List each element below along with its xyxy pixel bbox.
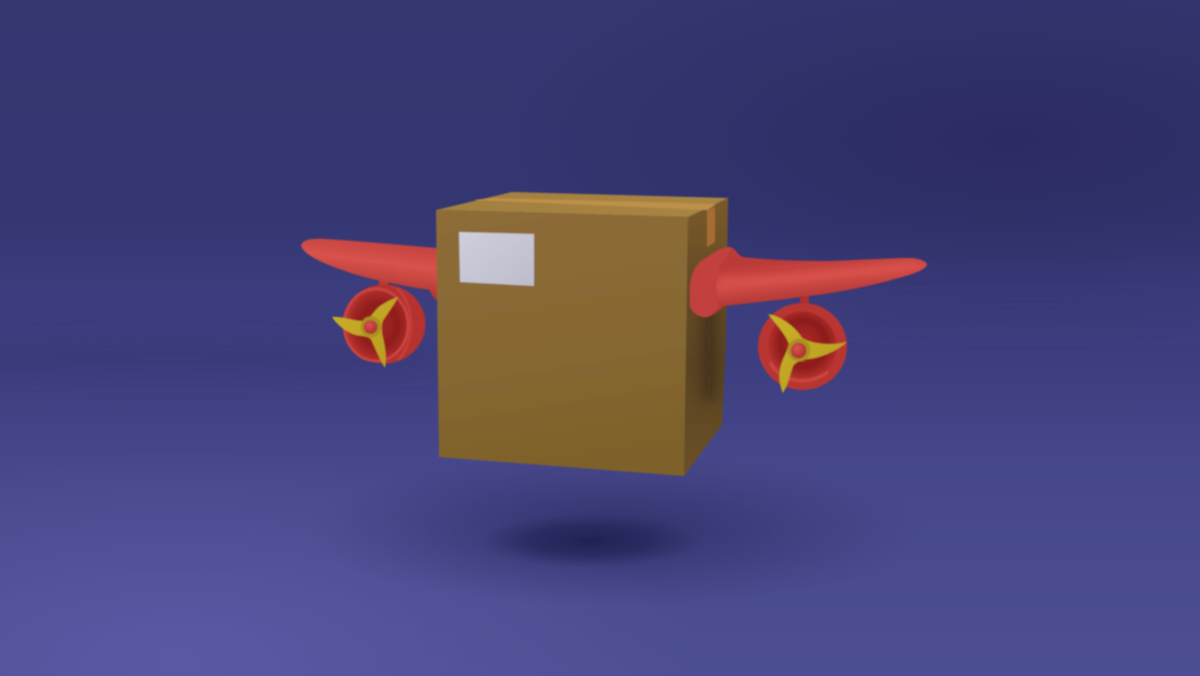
box right side xyxy=(684,198,728,476)
left wing xyxy=(301,239,437,300)
box front face xyxy=(436,210,688,476)
left propeller hub xyxy=(360,316,382,338)
right wing root xyxy=(690,247,731,317)
right engine strut xyxy=(800,296,809,306)
box side tape xyxy=(707,207,715,247)
box top tape xyxy=(473,198,716,210)
right wing xyxy=(690,247,927,317)
box top xyxy=(436,192,728,217)
wing shadow on box xyxy=(702,305,716,400)
left propeller blades xyxy=(332,297,398,368)
right engine nacelle xyxy=(758,303,847,390)
left engine nacelle xyxy=(342,284,426,364)
left propeller engine xyxy=(332,279,426,368)
right wing highlight xyxy=(722,264,915,281)
right propeller engine xyxy=(758,296,847,393)
ground shadow xyxy=(305,452,925,608)
shipping label xyxy=(459,232,534,286)
right propeller blades xyxy=(768,314,847,393)
cardboard box xyxy=(436,192,728,476)
left engine strut xyxy=(379,279,388,289)
right propeller hub xyxy=(788,338,810,362)
